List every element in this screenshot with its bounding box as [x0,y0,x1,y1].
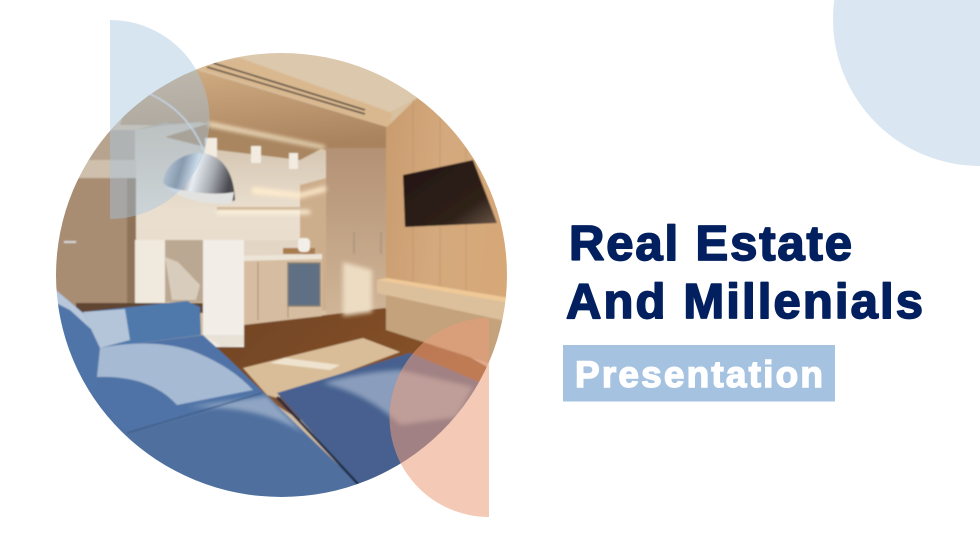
ceiling vent band [197,58,392,128]
seat two [127,396,360,510]
sofa base fill [50,285,360,510]
title line one: Real Estate [569,217,852,271]
sofa backrest [83,301,201,348]
under bench panel [386,295,510,370]
bench [377,278,510,322]
subtitle text: Presentation [575,354,823,395]
wall panel grooves [412,100,414,102]
vent slots [207,63,365,114]
banner background [563,345,835,402]
seat one and two crease [127,393,262,433]
sunlit patch on cabinet [343,262,372,316]
rug highlight [270,358,340,370]
peach half circle overlay [390,318,489,517]
seat three lit [323,370,473,425]
lower kitchen cabinets [243,258,322,325]
subtitle banner [563,345,835,402]
upper ceiling [238,53,416,111]
backrest lit zone [83,309,130,348]
lower shelf [217,207,310,210]
ceiling light strip [208,122,325,149]
circular room photo [50,45,510,510]
counter pillar [203,240,244,347]
kettle [298,238,310,252]
lintel band [78,160,136,179]
seat two lit [187,396,303,433]
lower shelf glow [217,210,310,214]
title [566,217,923,329]
blue half circle overlay [110,20,210,219]
wall mounted TV [403,160,497,227]
seat three [277,353,510,505]
door frame [127,170,136,308]
sofa end cushion [50,285,100,400]
door [50,178,127,310]
sofa gap [277,397,358,484]
cabinet [326,148,386,316]
cabinet side panel [300,178,326,315]
right wood wall [385,98,507,298]
bar chair [165,257,200,300]
chrome lamp [163,153,235,204]
pillar base [203,335,244,347]
end cushion lit edge [50,285,92,330]
soffit underside [120,70,390,155]
tray [283,248,315,254]
bench top [377,278,510,302]
oven [288,263,320,306]
glowing shelf top [252,186,326,198]
under wall pale section [135,240,165,306]
countertop [243,254,322,261]
decorative quarter circle top right [833,0,980,166]
seat one [97,335,267,433]
backsplash alcove [245,241,302,254]
lamp arc [150,94,206,156]
kitchen wall [134,122,326,256]
title line two: And Millenials [566,275,923,329]
left upper wall [88,122,172,160]
upper kitchen wood ledge [165,123,325,160]
lamp underside [165,186,234,204]
cabinet door divides [258,262,288,320]
photo background [84,57,488,464]
floor [205,308,510,420]
kitchen recess [165,240,203,302]
floor base left [76,303,206,313]
seat one lit [97,343,253,405]
cabinet handles [354,232,381,254]
rug [243,338,400,398]
spotlights [205,138,298,169]
door handle [64,241,76,243]
